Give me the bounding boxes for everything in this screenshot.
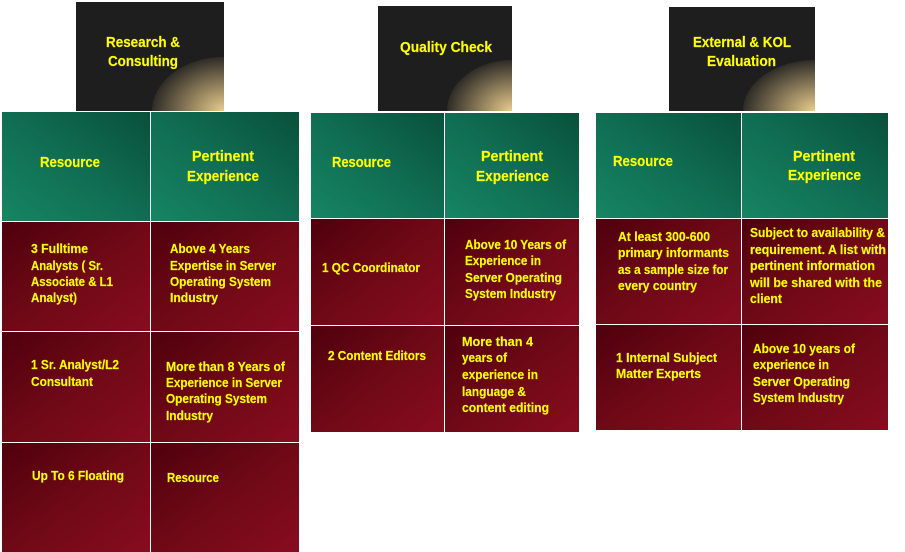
cell: more than 8 years: Industry bbox=[166, 408, 214, 423]
header: Pertinent Experience: Experience bbox=[788, 168, 861, 184]
cell: subject to availability: pertinent information bbox=[750, 258, 875, 273]
title box: External & KOL Evaluation: External & KOL bbox=[693, 35, 791, 51]
cell: floating: Up To 6 Floating bbox=[32, 468, 124, 483]
cell: fulltime analysts: Associate & L1 bbox=[31, 274, 113, 289]
header: Resource bbox=[596, 113, 741, 218]
cell: subject to availability: Subject to availability & bbox=[750, 225, 885, 240]
header: Pertinent Experience: Pertinent bbox=[481, 149, 543, 165]
header: Resource: Resource bbox=[613, 154, 673, 170]
header: Pertinent Experience: Experience bbox=[187, 169, 259, 185]
cell: senior analyst: 1 Sr. Analyst/L2 bbox=[31, 357, 119, 372]
cell: subject to availability: client bbox=[750, 291, 783, 306]
cell: fulltime analysts: Analysts ( Sr. bbox=[31, 258, 103, 273]
title box: Research & Consulting bbox=[76, 2, 224, 111]
header: Pertinent Experience bbox=[742, 113, 888, 218]
cell: more than 8 years: Operating System bbox=[166, 391, 267, 406]
header: Resource bbox=[311, 113, 444, 218]
cell: senior analyst bbox=[2, 332, 150, 442]
cell: subject to availability: requirement. A list with bbox=[750, 242, 886, 257]
cell: above 10 years: Server Operating bbox=[465, 270, 562, 285]
cell: QC coordinator: 1 QC Coordinator bbox=[322, 260, 420, 275]
cell: more than 4 years: years of bbox=[462, 350, 508, 365]
header: Resource: Resource bbox=[332, 155, 391, 171]
title box: External & KOL Evaluation: Evaluation bbox=[707, 54, 776, 70]
cell: resource: Resource bbox=[167, 470, 219, 485]
cell: more than 4 years: content editing bbox=[462, 400, 549, 415]
header: Resource: Resource bbox=[40, 155, 100, 171]
cell: more than 8 years bbox=[151, 332, 299, 442]
title box: Research & Consulting: Consulting bbox=[108, 54, 178, 70]
cell: above 4 years bbox=[151, 222, 299, 331]
column: Quality Check bbox=[311, 6, 579, 432]
cell: content editors bbox=[311, 326, 444, 432]
cell: above 10 years: System Industry bbox=[465, 286, 557, 301]
cell: primary informants: every country bbox=[618, 278, 698, 293]
cell: internal subject matter experts: 1 Internal Subject bbox=[616, 350, 718, 365]
cell: internal subject matter experts bbox=[596, 325, 741, 430]
cell: above 10 years experience: Above 10 years of bbox=[753, 341, 856, 356]
title box: Quality Check bbox=[378, 6, 512, 111]
title box: External & KOL Evaluation bbox=[669, 7, 815, 111]
cell: fulltime analysts: 3 Fulltime bbox=[31, 241, 88, 256]
title box: Research & Consulting: Research & bbox=[106, 35, 180, 51]
cell: above 4 years: Above 4 Years bbox=[170, 241, 250, 256]
cell: primary informants: as a sample size for bbox=[618, 262, 728, 277]
cell: above 10 years experience: Server Operating bbox=[753, 374, 850, 389]
cell: more than 4 years: experience in bbox=[462, 367, 538, 382]
cell: above 10 years: Above 10 Years of bbox=[465, 237, 567, 252]
cell: above 4 years: Industry bbox=[170, 290, 219, 305]
cell: subject to availability bbox=[742, 219, 888, 324]
cell: primary informants: primary informants bbox=[618, 245, 729, 260]
cell: above 10 years experience: experience in bbox=[753, 357, 829, 372]
cell: more than 8 years: More than 8 Years of bbox=[166, 359, 286, 374]
cell: above 10 years experience: System Industry bbox=[753, 390, 845, 405]
cell: subject to availability: will be shared with the bbox=[749, 275, 882, 290]
cell: above 10 years experience bbox=[742, 325, 888, 430]
header: Pertinent Experience bbox=[445, 113, 579, 218]
cell: more than 4 years: More than 4 bbox=[462, 334, 534, 349]
column: External & KOL Evaluation bbox=[596, 7, 888, 430]
cell: above 10 years bbox=[445, 219, 579, 325]
title box: Quality Check: Quality Check bbox=[400, 40, 493, 56]
cell: primary informants: At least 300-600 bbox=[618, 229, 710, 244]
cell: QC coordinator bbox=[311, 219, 444, 325]
header: Pertinent Experience: Pertinent bbox=[192, 149, 254, 165]
cell: more than 8 years: Experience in Server bbox=[166, 375, 282, 390]
header: Pertinent Experience bbox=[151, 112, 299, 221]
cell: senior analyst: Consultant bbox=[31, 374, 94, 389]
column: Research & Consulting bbox=[2, 2, 299, 552]
cell: content editors: 2 Content Editors bbox=[328, 348, 426, 363]
cell: above 4 years: Operating System bbox=[170, 274, 271, 289]
cell: primary informants bbox=[596, 219, 741, 324]
cell: above 4 years: Expertise in Server bbox=[170, 258, 276, 273]
cell: fulltime analysts bbox=[2, 222, 150, 331]
header: Pertinent Experience: Pertinent bbox=[793, 149, 855, 165]
cell: more than 4 years bbox=[445, 326, 579, 432]
cell: resource bbox=[151, 443, 299, 552]
cell: internal subject matter experts: Matter Experts bbox=[616, 366, 701, 381]
cell: fulltime analysts: Analyst) bbox=[31, 290, 77, 305]
header: Pertinent Experience: Experience bbox=[476, 169, 549, 185]
cell: above 10 years: Experience in bbox=[465, 253, 541, 268]
cell: floating bbox=[2, 443, 150, 552]
cell: more than 4 years: language & bbox=[462, 384, 526, 399]
header: Resource bbox=[2, 112, 150, 221]
